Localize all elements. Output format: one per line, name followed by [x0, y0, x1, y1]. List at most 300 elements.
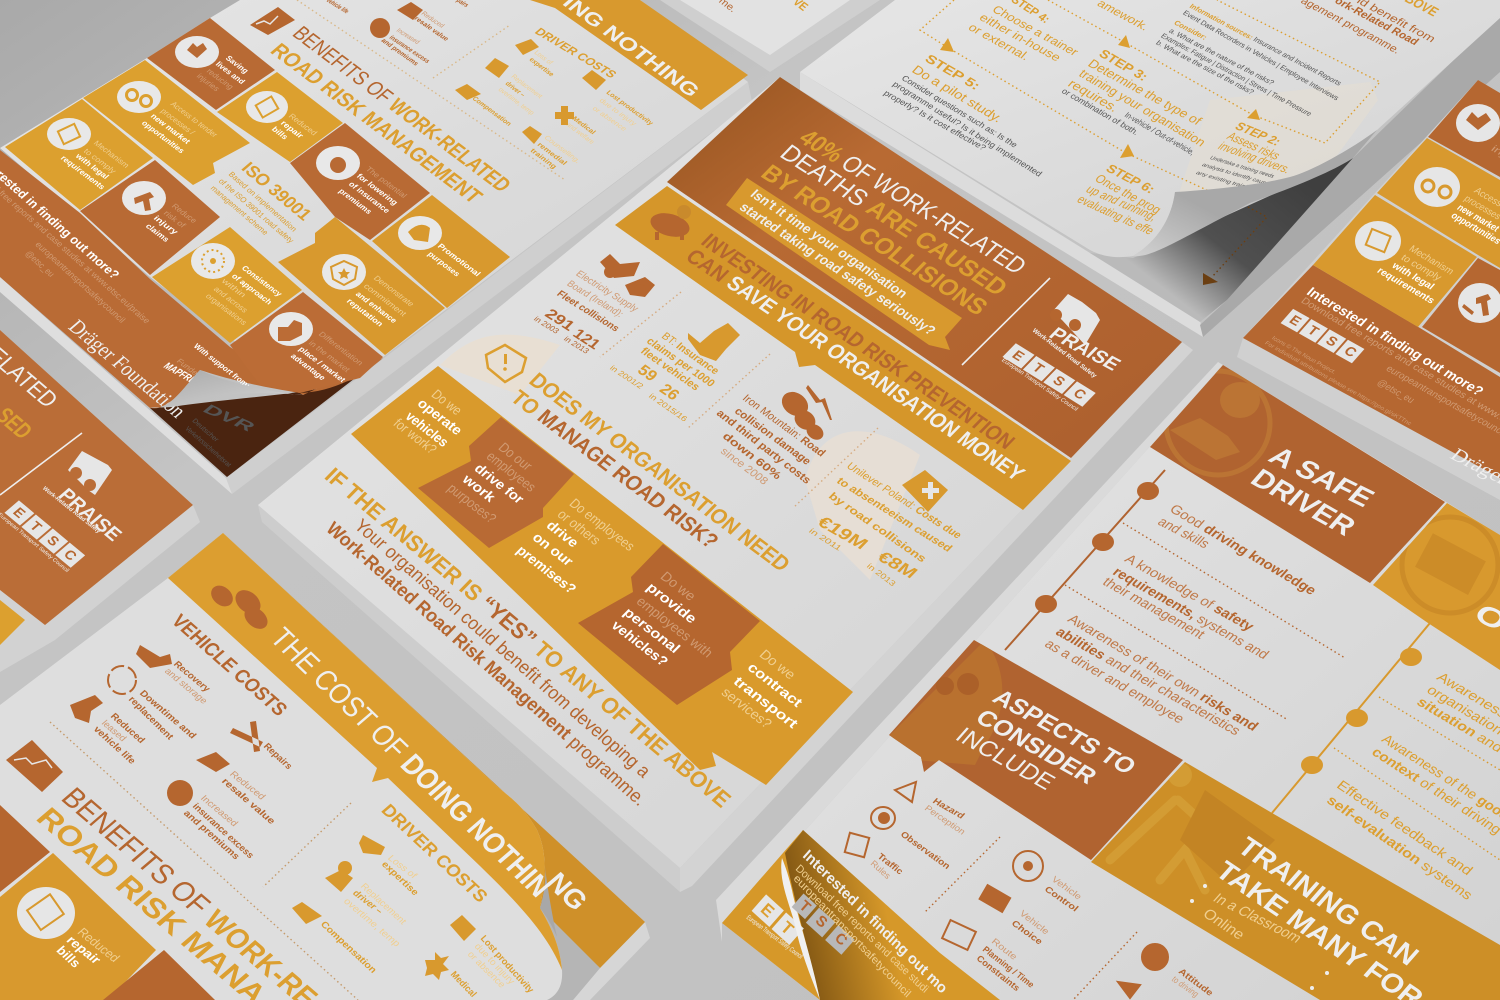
footer text: Icons © The Noun Project.	[1270, 335, 1338, 376]
heading: 40% OF WORK-RELATED	[793, 125, 1032, 279]
timeline texts: requirements, systems and	[1110, 564, 1273, 662]
stat: BT: in 2015/16	[647, 392, 690, 424]
icon: receipt circle	[17, 887, 75, 939]
step texts: properly? Is it cost effective?	[882, 88, 989, 152]
timeline texts: Good driving knowledge	[1167, 501, 1320, 598]
block labels: injuries	[195, 72, 221, 93]
block: differentiation	[230, 292, 383, 393]
small cost icons	[370, 2, 606, 144]
aspects list: Perception	[923, 803, 967, 837]
footer text: europeantransportsafetycouncil	[33, 240, 127, 325]
stat: unilever: €19M	[813, 513, 872, 553]
vehicle costs list: leased	[99, 718, 128, 744]
aspects list: Constraints	[975, 953, 1022, 993]
block: consistency	[152, 227, 302, 343]
icon: shield	[486, 345, 526, 382]
step texts: up and running,	[1083, 182, 1161, 223]
driver costs list: or absence	[465, 949, 507, 990]
timeline texts: and skills	[1155, 514, 1213, 551]
dotted arrow under curl	[1212, 207, 1267, 277]
vehicle costs list: resale value	[219, 776, 277, 826]
footer text: With support from:	[192, 342, 252, 389]
header: training	[1091, 762, 1500, 1000]
ISO 39001 callout: Based on implementation	[227, 170, 299, 233]
block labels: Demonstrate	[372, 274, 416, 308]
block labels: bills	[270, 125, 290, 141]
icon: coins	[207, 581, 272, 633]
aspects list: Planning / Time	[981, 944, 1036, 990]
block labels: claims	[144, 222, 172, 244]
block labels: and across	[212, 285, 250, 314]
step texts: Information sources: Insurance and Incident Reports	[1188, 2, 1344, 87]
block labels: reputation	[345, 297, 385, 328]
logo: ETSC: T	[1029, 360, 1048, 376]
divider	[962, 278, 1050, 365]
step texts: Choose a trainer	[989, 3, 1081, 58]
question texts: Do we	[428, 386, 466, 418]
right texts	[1324, 669, 1500, 903]
dividers	[50, 722, 358, 1000]
logo: PRAISE: Work-Related Road Safety	[1031, 327, 1098, 380]
step texts: In-vehicle / Out-of-vehicle,	[1123, 110, 1197, 157]
question texts: Do employees	[566, 495, 638, 554]
vehicle and driver cost fragments: Lost productivity	[604, 90, 654, 127]
aspects list: Route	[990, 936, 1019, 962]
aspects list: Control	[1043, 884, 1080, 913]
panel: bottom-left flyer cost	[0, 533, 650, 1000]
heading: does my organisation: TO MANAGE ROAD RISK?	[506, 385, 724, 553]
step texts: Examples: Fatigue | Distraction | Stress | Time Pressure	[1159, 32, 1314, 118]
ISO 39001 callout: of the ISO 39001 road safety	[217, 177, 296, 245]
footer text: Dräger Foundation	[64, 315, 192, 422]
block labels: of approach	[230, 272, 274, 306]
vehicle and driver cost fragments: resale value	[412, 16, 450, 43]
block labels	[59, 54, 482, 384]
block labels: Access to tender	[169, 100, 220, 139]
header: a safe driver	[1150, 365, 1445, 583]
vehicle and driver cost fragments: or absence	[590, 106, 628, 133]
block labels: commitment	[362, 282, 409, 318]
step texts: STEP 2:	[1232, 119, 1284, 148]
aspects list: Vehicle	[1018, 908, 1051, 937]
curl flap	[1133, 130, 1377, 256]
labels: requirements	[1374, 266, 1437, 306]
block: promotional	[372, 195, 510, 308]
icon circles	[1355, 104, 1500, 323]
question texts: employees	[483, 448, 540, 495]
block: reduced repair	[217, 72, 343, 162]
block: mechanism	[5, 99, 153, 210]
stat: iron mountain: down 60%	[720, 431, 784, 482]
block labels: place / market	[297, 345, 348, 384]
header: right orange	[1373, 503, 1500, 670]
block labels: Reduce	[170, 202, 199, 225]
block labels: Reduced	[287, 112, 319, 137]
block labels: Promotional	[436, 242, 482, 278]
icon circles	[47, 36, 442, 346]
stat: BT: 59	[634, 362, 661, 385]
heading: BY ROAD COLLISIONS	[755, 160, 993, 320]
panel: bottom-right flyer	[716, 362, 1500, 1000]
block labels: with legal	[73, 151, 111, 181]
header: training: TRAINING CAN	[1232, 831, 1425, 971]
labels: to comply	[1398, 253, 1444, 283]
footer block	[0, 150, 383, 408]
step texts: Consider:	[1172, 19, 1209, 41]
footer text: Interested in finding out mo	[799, 847, 950, 997]
footer text: @etsc_eu	[23, 249, 57, 279]
vehicle costs list: Downtime and	[137, 688, 199, 741]
stat: unilever: Unilever Poland: Costs due	[844, 461, 964, 541]
logo: ETSC: S	[1323, 333, 1341, 349]
driver costs list	[318, 800, 536, 1000]
lower sheet logo: ETSC: E	[757, 900, 778, 921]
dividers	[924, 837, 1137, 1000]
footer block	[1243, 265, 1500, 478]
heading: does my organisation: DOES MY ORGANISATION NEED	[524, 368, 795, 576]
page curl flap	[150, 370, 305, 408]
question texts: employees with	[633, 593, 716, 660]
shaded logo: ETSC: C	[831, 929, 851, 950]
sheet	[258, 77, 1182, 868]
vehicle and driver cost fragments: Reduced	[419, 11, 445, 29]
ISO 39001 callout: management scheme	[209, 184, 271, 237]
labels: with legal	[1388, 260, 1436, 292]
block labels: lives and	[214, 60, 247, 86]
block: reduce	[80, 160, 220, 275]
repair label: bills	[53, 943, 84, 970]
labels	[1374, 144, 1500, 306]
lower sheet	[168, 533, 645, 968]
block: mechanism	[1313, 195, 1477, 327]
driver costs list: Lost productivity	[478, 933, 536, 996]
driver costs list: due to injury	[472, 941, 517, 987]
vehicle and driver cost fragments: insurance excess	[387, 35, 431, 65]
shaded logo: ETSC	[790, 894, 855, 955]
timeline texts: Awareness of their own risks and	[1065, 611, 1262, 734]
logo: PRAISE: PRAISE	[54, 485, 126, 545]
driver costs list: Compensation	[318, 919, 379, 976]
block labels: opportunities	[140, 119, 187, 155]
block: saving lives	[147, 18, 275, 110]
block labels: risk of	[162, 209, 188, 230]
icon: chart board	[250, 7, 295, 35]
repair label	[53, 925, 123, 970]
question texts: purposes?	[444, 480, 500, 526]
right texts: self-evaluation systems	[1324, 792, 1476, 903]
step texts: STEP 3:	[1096, 46, 1151, 84]
logo: ETSC: C	[1070, 385, 1090, 402]
logo: ETSC	[1281, 309, 1364, 363]
block: demonstrate	[278, 217, 445, 355]
logo: ETSC: S	[44, 532, 63, 549]
lower sheet logo: ETSC	[752, 894, 804, 945]
vehicle and driver cost fragments: Loss of	[532, 50, 554, 66]
footer text	[0, 153, 252, 422]
header: training: Online	[1199, 906, 1248, 943]
stat: electricity: Fleet collisions	[554, 289, 622, 334]
question texts: vehicles?	[608, 617, 672, 669]
block labels: to comply	[82, 147, 118, 175]
block labels: The potential	[364, 165, 409, 200]
driver costs list: expertise	[379, 859, 421, 898]
block labels: and enhance	[354, 290, 399, 325]
header: a safe driver: A SAFE	[1263, 441, 1380, 512]
vehicle and driver cost fragments: Replacement	[509, 74, 543, 100]
logo: ETSC: E	[10, 504, 29, 521]
logo: PRAISE	[1031, 294, 1125, 380]
vehicle and driver cost fragments: Increased	[394, 28, 421, 46]
step texts: any existing training	[1194, 171, 1256, 192]
ETSC subtitle: European Transport Safety Council	[1000, 358, 1079, 413]
stat: iron mountain: Iron Mountain: Road	[740, 393, 828, 459]
question texts: or others	[554, 506, 604, 548]
question texts: drive for	[471, 460, 528, 507]
vehicle costs list: Reduced	[108, 711, 147, 746]
question block: drive for work	[418, 417, 574, 548]
vehicle and driver cost fragments: Compensation	[470, 96, 512, 127]
panel: bottom-left flyer cost: ROAD RISK MANA	[29, 802, 273, 1000]
stat: electricity: Board (Ireland):	[564, 279, 625, 320]
block labels: purposes	[426, 250, 462, 278]
right texts: organisation	[1424, 682, 1500, 737]
block labels: Saving	[224, 54, 251, 75]
stat: unilever: in 2013	[865, 562, 898, 588]
footer text: MAPFRE	[160, 361, 199, 386]
question block: personal vehicles	[578, 544, 760, 705]
stat: iron mountain	[714, 385, 832, 487]
question texts: drive	[543, 517, 582, 550]
DVR logo under curl: DVR	[198, 402, 259, 435]
driver costs list: Loss of	[385, 853, 420, 881]
stat: BT: BT: Insurance	[659, 331, 721, 377]
stat: electricity	[532, 254, 655, 356]
block labels: in the market	[307, 339, 352, 374]
question texts: work	[459, 471, 499, 505]
band heading: CAN SAVE YOUR ORGANISATION MONEY	[681, 244, 1030, 486]
footer text: Download free reports and case studi	[793, 862, 931, 996]
header: aspects: CONSIDER	[970, 705, 1102, 789]
aspects list: Choice	[1010, 918, 1045, 946]
DVR logo under curl: Deutscher	[190, 418, 220, 444]
step texts: evaluating its effe	[1074, 192, 1158, 237]
logo: ETSC: T	[27, 518, 46, 534]
question texts: personal	[620, 604, 684, 656]
vehicle and driver cost fragments	[324, 0, 654, 170]
block labels: Mechanism	[92, 139, 131, 170]
footer text: For individual attributions please see https://goo.gl/sKTTnc	[1263, 341, 1412, 427]
timeline: safe driver	[1005, 470, 1345, 720]
ISO 39001 callout	[209, 159, 316, 245]
stat: electricity: Electricity Supply	[573, 269, 640, 314]
tag: question: Isn't it time your organisation	[747, 186, 911, 301]
repair label: repair	[63, 933, 104, 966]
step texts: Once the prog	[1092, 171, 1165, 216]
DVR logo under curl: Verkehrssicherheitsrat	[183, 426, 232, 469]
heading: benefits: BENEFITS OF WORK-RELATED	[288, 22, 517, 196]
block: reduce	[1422, 258, 1500, 373]
stat: BT: claims per 1000	[644, 336, 717, 389]
step texts: STEP 5:	[922, 51, 984, 93]
question band	[351, 366, 853, 785]
stat: unilever: in 2011	[807, 527, 844, 553]
divider	[0, 433, 82, 495]
vehicle costs list: replacement	[126, 694, 176, 743]
header: training: In a Classroom	[1209, 891, 1305, 946]
timeline: right	[1272, 623, 1500, 860]
arrows	[940, 35, 1260, 158]
band heading: INVESTING IN ROAD RISK PREVENTION	[696, 229, 1020, 454]
panel: small sheet at top	[660, 0, 880, 72]
repair label: Reduced	[74, 925, 123, 965]
orange band	[168, 533, 562, 970]
stat: iron mountain: collision damage	[732, 406, 813, 467]
question texts: provide	[643, 579, 701, 626]
step texts: b. What are the size of the risks?	[1154, 39, 1256, 96]
header: aspects	[889, 640, 1183, 860]
logo: ETSC: E	[1286, 312, 1305, 329]
footer text	[1263, 284, 1500, 489]
vehicle costs list: and premiums	[181, 808, 242, 862]
watermark	[1180, 82, 1378, 192]
timeline texts: as a driver and employee	[1042, 636, 1188, 726]
block labels: premiums	[337, 187, 374, 216]
right texts: context of their driving	[1369, 744, 1500, 837]
stat: BT: 26	[656, 381, 683, 404]
stat: unilever: to absenteeism caused	[834, 476, 954, 554]
icon: chart	[6, 740, 63, 792]
conclusion text: Work-Related Road Risk Management programme.	[322, 518, 651, 810]
step texts: either in-house	[976, 11, 1064, 64]
question texts: transport	[730, 673, 802, 731]
vehicle costs list	[91, 611, 294, 862]
vehicle and driver cost fragments: remedial	[535, 142, 568, 167]
vehicle costs list: and storage	[162, 666, 209, 706]
icons: driver costs	[292, 835, 476, 980]
block labels: Differentiation	[317, 330, 365, 367]
header: aspects: ASPECTS TO	[987, 685, 1141, 780]
timeline texts	[1042, 501, 1320, 738]
stat: iron mountain: and third party costs	[714, 408, 813, 486]
logo: ETSC: T	[1305, 322, 1323, 339]
labels: Mechanism	[1406, 244, 1456, 277]
logo: PRAISE: Work-Related Road Safety	[41, 486, 102, 535]
footer text: Interested in finding out more?	[1304, 284, 1487, 399]
block: access	[83, 60, 250, 185]
block: saving	[1428, 80, 1500, 177]
aspects list: Traffic	[876, 851, 905, 876]
vehicle costs list: vehicle life	[91, 724, 138, 766]
aspects list: Vehicle	[1050, 874, 1084, 901]
dotted dividers	[297, 0, 565, 180]
curl white strip	[781, 858, 820, 1000]
question texts: operate	[414, 395, 466, 438]
question texts: Do we	[657, 568, 700, 604]
step texts: or external.	[965, 21, 1033, 63]
step texts: STEP 6:	[1103, 161, 1158, 196]
stat: BT: in 2001/2	[608, 364, 646, 391]
driver costs list: driver –	[350, 888, 385, 916]
stat: BT	[608, 323, 740, 424]
vehicle costs list: Recovery	[171, 659, 213, 695]
stat: electricity: in 2013	[562, 335, 592, 356]
step path dotted	[920, 0, 1380, 192]
stat: iron mountain: since 2008	[718, 446, 770, 487]
footer text: europeantransportsafetycouncil	[791, 872, 913, 1000]
block labels: for lowering	[355, 172, 400, 207]
blocks	[0, 805, 50, 892]
panel: top-left flyer benefits: DRIVER COSTS	[532, 25, 620, 80]
vehicle and driver cost fragments: training	[528, 148, 558, 170]
step texts: a. What are the nature of the risks?	[1167, 27, 1276, 87]
watermarks	[440, 335, 560, 395]
footer text: Funded	[175, 357, 204, 380]
vehicle and driver cost fragments: Medical	[570, 116, 596, 136]
footer text: @etsc_eu	[1374, 378, 1416, 406]
aspects icons	[845, 782, 1168, 998]
step texts: requires.	[1065, 76, 1122, 115]
block: access	[1377, 138, 1500, 268]
block labels: of insurance	[347, 180, 392, 215]
step texts: Consider questions such as: Is the	[900, 73, 1020, 150]
logo: PRAISE	[41, 451, 126, 545]
aspects list: Rules	[869, 858, 893, 881]
lower sheet NG: NG	[540, 867, 594, 916]
footer yellow	[722, 830, 1000, 1000]
block labels: reducing	[205, 67, 235, 91]
step texts: or combination of both.	[1060, 86, 1141, 137]
right texts: Effective feedback and	[1334, 777, 1476, 878]
vehicle and driver cost fragments: Counselling,	[542, 135, 581, 165]
icons: vehicle costs	[70, 645, 263, 806]
tag: question: started taking road safety seriously?	[736, 199, 939, 338]
ETSC subtitle: European Transport Safety Council	[745, 914, 804, 961]
block labels: within	[219, 276, 248, 299]
stat: unilever	[807, 461, 964, 588]
panel: left flyer header	[0, 330, 200, 672]
vehicle costs list: Repairs	[261, 741, 294, 772]
aspects list: Hazard	[931, 796, 967, 820]
logo: PRAISE: PRAISE	[1044, 324, 1125, 375]
stat: electricity: 121	[569, 326, 604, 353]
question texts: premises?	[513, 542, 580, 596]
panel: central flyer	[258, 77, 1193, 892]
stat: unilever: by road collisions	[826, 491, 928, 565]
timeline texts: their management	[1100, 574, 1209, 641]
dividers	[600, 292, 878, 508]
curl underside	[540, 867, 557, 937]
aspects list	[869, 796, 1215, 999]
step texts: Determine the type of	[1085, 56, 1205, 128]
step texts: training your organisation	[1076, 66, 1209, 149]
block labels: injury	[152, 214, 181, 237]
logo: ETSC: C	[1341, 343, 1360, 360]
vehicle costs list: insurance excess	[190, 801, 256, 861]
top header	[667, 77, 1182, 458]
header: a safe driver: DRIVER	[1245, 463, 1362, 541]
vehicle and driver cost fragments: and premiums	[379, 38, 420, 67]
question texts	[390, 386, 806, 731]
vehicle costs list: Reduced	[227, 769, 268, 802]
question texts: for work?	[390, 415, 440, 457]
vehicle and driver cost fragments: driver –	[503, 81, 526, 99]
question texts: on our	[529, 529, 577, 569]
question texts: services?	[718, 684, 776, 731]
top sheet	[0, 533, 562, 1000]
block labels: new market	[149, 112, 192, 146]
shaded logo: ETSC: S	[812, 912, 831, 931]
block labels: repair	[279, 119, 305, 140]
